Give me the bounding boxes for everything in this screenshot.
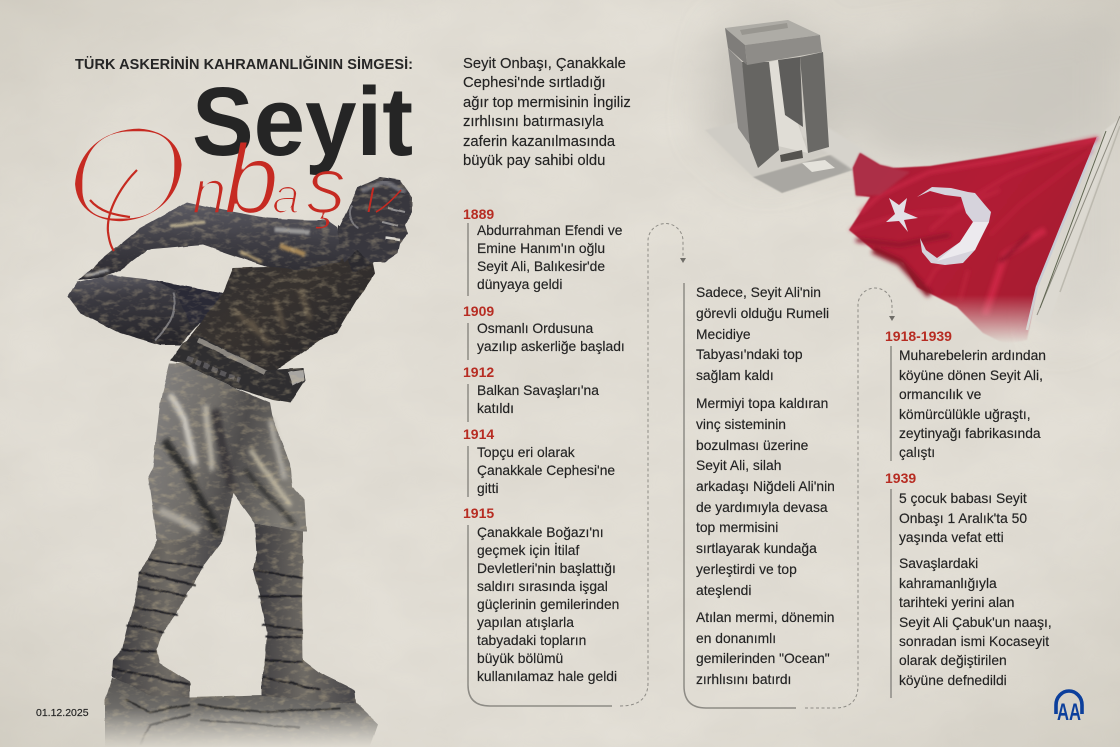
AA agency logo: AA (1057, 699, 1081, 726)
entry 1915: saldırı sırasında işgal (477, 578, 608, 594)
entry 1915: kullanılamaz hale geldi (477, 668, 617, 684)
entry 1915: tabyadaki topların (477, 632, 586, 648)
intro text: Seyit Onbaşı, Çanakkale (463, 56, 626, 72)
entry 1915: geçmek için İtilaf (477, 541, 579, 558)
paragraph: mermiyi: de yardımıyla devasa (696, 499, 828, 515)
flag pole (1035, 116, 1120, 325)
monument front pillars (742, 62, 779, 168)
statue base rock (105, 678, 378, 747)
paragraph: mermiyi: Mermiyi topa kaldıran (696, 395, 828, 411)
entry 1889: Seyit Ali, Balıkesir'de (477, 258, 605, 274)
dashed connector arrow 1 (620, 224, 686, 706)
statue head (338, 177, 412, 262)
entry 1918-1939: ormancılık ve (899, 386, 982, 402)
paragraph: sadece: Tabyası'ndaki top (696, 346, 803, 362)
entry 1939: köyüne defnedildi (899, 672, 1007, 688)
statue trouser folds (160, 395, 295, 535)
hazy aerial landscape behind flag (705, 10, 1120, 340)
paragraph: atılan mermi (696, 609, 834, 687)
entry 1912: katıldı (477, 400, 514, 416)
entry 1939: tarihteki yerini alan (899, 594, 1014, 610)
entry 1939: Onbaşı 1 Aralık'ta 50 (899, 510, 1027, 526)
entry 1914: Çanakkale Cephesi'ne (477, 462, 615, 478)
monument platform (707, 130, 762, 176)
entry 1918-1939: kömürcülükle uğraştı, (899, 406, 1031, 422)
entry 1915: güçlerinin gemilerinden (477, 596, 619, 612)
flag folds (850, 138, 1098, 315)
flag hoist edge (1027, 137, 1098, 330)
statue of Seyit Onbaşı (68, 177, 412, 747)
paragraph: mermiyi: Seyit Ali, silah (696, 457, 781, 473)
entry 1915: yapılan atışlarla (477, 614, 574, 630)
entry 1909: yazılıp askerliğe başladı (477, 338, 625, 354)
entry 1939: Seyit Ali Çabuk'un naaşı, (899, 614, 1052, 630)
title: Onbaşı script: a (272, 168, 300, 224)
intro text: Cephesi'nde sırtladığı (463, 75, 606, 91)
monument top block (725, 20, 820, 45)
title: Onbaşı script: ş (306, 141, 346, 230)
entry 1939: sonradan ismi Kocaseyit (899, 633, 1049, 649)
intro text (463, 56, 631, 169)
entry 1889: dünyaya geldi (477, 276, 562, 292)
subtitle: TÜRK ASKERİNİN KAHRAMANLIĞININ SİMGESİ: (75, 55, 413, 73)
monument photo (707, 20, 852, 194)
paragraph: mermiyi: sırtlayarak kundağa (696, 540, 817, 556)
title: Onbaşı script: O (62, 95, 190, 255)
entry 1889 (468, 222, 623, 296)
entry 1914: Topçu eri olarak (477, 444, 575, 460)
paragraph: atılan mermi: zırhlısını batırdı (696, 671, 791, 687)
entry 1914: gitti (477, 480, 499, 496)
entry 1939: Savaşlardaki (899, 555, 978, 571)
entry 1918-1939: Muharebelerin ardından (899, 347, 1046, 363)
paragraph: atılan mermi: en donanımlı (696, 630, 776, 646)
entry 1915: Devletleri'nin başlattığı (477, 560, 616, 576)
intro text: büyük pay sahibi oldu (463, 153, 605, 169)
paragraph: sadece: sağlam kaldı (696, 367, 774, 383)
monument visitors (780, 150, 803, 162)
flag loose top corner (853, 153, 910, 196)
entry 1909 (468, 320, 625, 360)
flag star (886, 198, 918, 232)
paragraph: mermiyi: bozulması üzerine (696, 437, 809, 453)
entry 1889: Abdurrahman Efendi ve (477, 222, 623, 238)
entry 1918-1939: zeytinyağı fabrikasında (899, 425, 1041, 441)
year 1914: 1914 (463, 426, 494, 442)
intro text: ağır top mermisinin İngiliz (463, 93, 631, 111)
statue right leg gaiter (253, 523, 356, 704)
entry 1918-1939: çalıştı (899, 444, 935, 460)
year 1909: 1909 (463, 303, 494, 319)
year 1889: 1889 (463, 206, 494, 222)
paragraph: sadece: Sadece, Seyit Ali'nin (696, 284, 821, 300)
paragraph: mermiyi: top mermisini (696, 519, 778, 535)
entry 1939: kahramanlığıyla (899, 575, 997, 591)
monument back pillars (728, 48, 750, 145)
year 1912: 1912 (463, 364, 494, 380)
year 1918-1939: 1918-1939 (885, 328, 952, 344)
statue trousers (148, 363, 307, 540)
year 1939: 1939 (885, 470, 916, 486)
paragraph: mermiyi: arkadaşı Niğdeli Ali'nin (696, 478, 835, 494)
entry 1915 (468, 524, 619, 706)
entry 1939: yaşında vefat etti (899, 529, 1004, 545)
intro text: zaferin kazanılmasında (463, 134, 616, 150)
entry 1909: Osmanlı Ordusuna (477, 320, 593, 336)
entry 1915: Çanakkale Boğazı'nı (477, 524, 604, 540)
statue arm highlights (85, 222, 310, 275)
statue ammunition belt (170, 335, 305, 403)
timeline column 1 (463, 206, 625, 706)
monument opening (769, 60, 808, 153)
paragraph: sadece (696, 284, 829, 383)
entry 1918-1939: köyüne dönen Seyit Ali, (899, 367, 1043, 383)
date: 01.12.2025 (36, 707, 89, 719)
title: Onbaşı script: b (224, 124, 279, 234)
statue torso (187, 258, 375, 370)
title: Onbaşı script: n (192, 158, 226, 227)
entry 1915: büyük bölümü (477, 650, 563, 666)
title: Onbaşı script (62, 95, 401, 255)
paragraph: mermiyi (696, 395, 835, 598)
statue neck (338, 225, 374, 272)
timeline column 2 (684, 283, 835, 708)
entry 1918-1939 (891, 346, 1046, 461)
dashed connector arrow 2 (805, 288, 895, 708)
paragraph: mermiyi: ateşlendi (696, 582, 751, 598)
title: Seyit: Seyit (192, 67, 413, 176)
entry 1914 (468, 444, 615, 497)
entry 1912 (468, 382, 599, 422)
entry 1889: Emine Hanım'ın oğlu (477, 240, 605, 256)
paragraph: atılan mermi: gemilerinden "Ocean" (696, 650, 830, 666)
paragraph: atılan mermi: Atılan mermi, dönemin (696, 609, 834, 625)
entry 1912: Balkan Savaşları'na (477, 382, 599, 398)
flag cloth (849, 137, 1098, 345)
title: Onbaşı script: ı (364, 168, 378, 224)
paragraph: sadece: görevli olduğu Rumeli (696, 305, 829, 321)
Turkish flag (849, 137, 1098, 345)
statue raised arm (78, 202, 345, 280)
timeline column 3 (885, 328, 1052, 698)
intro text: zırhlısını batırmasıyla (463, 114, 604, 130)
flag crescent (917, 187, 991, 265)
statue leg wraps (113, 560, 320, 690)
entry 1939: 5 çocuk babası Seyit (899, 490, 1027, 506)
paragraph: mermiyi: yerleştirdi ve top (696, 561, 797, 577)
year 1915: 1915 (463, 505, 494, 521)
entry 1939: olarak değiştirilen (899, 652, 1007, 668)
statue artillery shell (68, 275, 223, 345)
paragraph: sadece: Mecidiye (696, 326, 751, 342)
entry 1939 (891, 489, 1052, 698)
AA agency logo (1056, 691, 1082, 726)
paragraph: mermiyi: vinç sisteminin (696, 416, 786, 432)
statue left leg gaiter (112, 540, 223, 698)
